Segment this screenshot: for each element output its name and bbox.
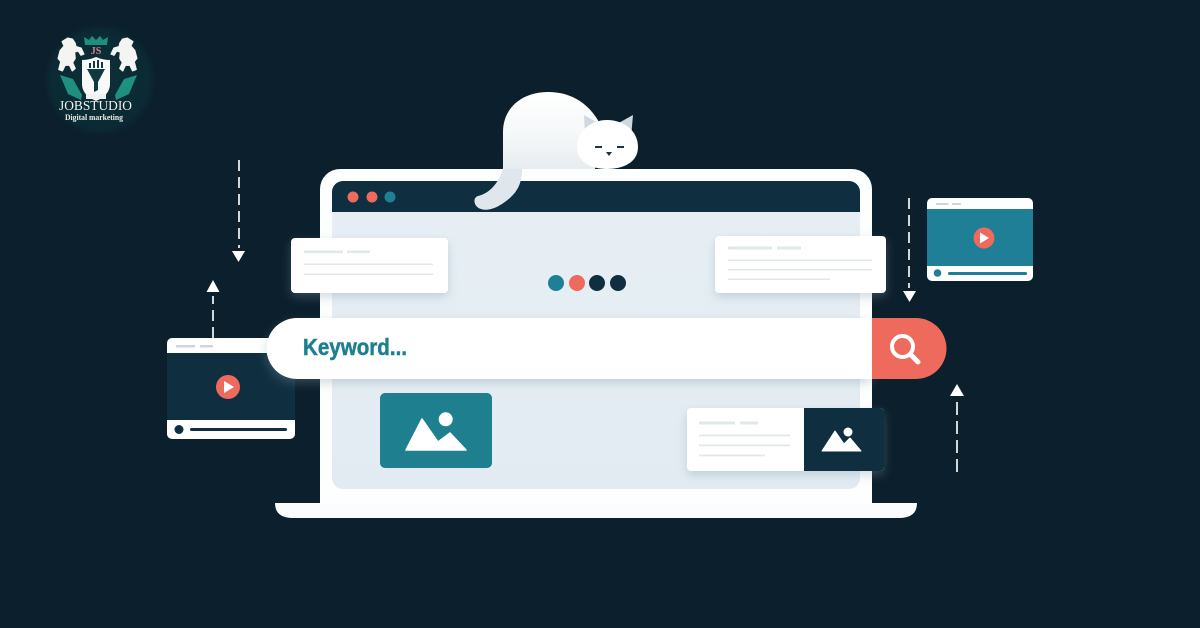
card text lines bbox=[699, 422, 790, 456]
laptop base bbox=[275, 503, 917, 518]
video frame bbox=[167, 353, 295, 420]
arrow: left dashed down bbox=[232, 160, 245, 262]
logo horse left bbox=[58, 38, 84, 71]
cat tail bbox=[474, 160, 522, 210]
teal image tile bbox=[380, 393, 492, 468]
logo crown bbox=[84, 36, 108, 45]
arrow: right dashed down bbox=[903, 198, 916, 302]
left video player bbox=[167, 338, 295, 439]
laptop screen bbox=[332, 181, 860, 489]
progress bar bbox=[934, 269, 1027, 277]
left text card bbox=[291, 238, 448, 293]
arrow: right dashed up bbox=[950, 384, 964, 472]
play button bbox=[974, 228, 994, 248]
play button bbox=[216, 375, 240, 399]
cat ears bbox=[584, 115, 633, 138]
loading dots bbox=[548, 275, 626, 291]
search bar bbox=[266, 318, 946, 379]
arrow: left dashed up bbox=[206, 280, 220, 338]
logo tagline: Digital marketing bbox=[65, 112, 124, 122]
cat head bbox=[577, 120, 638, 169]
text card with image bbox=[687, 408, 884, 471]
cat face bbox=[595, 147, 624, 156]
progress bar bbox=[174, 425, 287, 434]
search placeholder text: Keyword... bbox=[303, 334, 407, 360]
icon: mountains bbox=[406, 412, 466, 450]
dark image panel bbox=[804, 408, 884, 471]
logo horse right bbox=[111, 38, 137, 71]
laptop lid bbox=[320, 169, 872, 503]
right video player bbox=[927, 198, 1033, 281]
logo ribbon bbox=[86, 94, 106, 99]
title bar lines bbox=[176, 345, 195, 348]
video frame bbox=[927, 209, 1033, 266]
cat body bbox=[503, 92, 603, 169]
right text card bbox=[715, 236, 886, 293]
logo monogram: JS bbox=[91, 46, 102, 57]
search input bbox=[266, 318, 872, 379]
logo shield bbox=[82, 57, 110, 101]
laptop bbox=[275, 169, 917, 518]
logo brand name: JOBSTUDIO bbox=[59, 98, 132, 113]
logo leaves bbox=[60, 75, 137, 100]
title bar lines bbox=[936, 203, 948, 205]
icon: mountains bbox=[822, 428, 861, 451]
browser top bar bbox=[332, 181, 860, 212]
logo funnel chart bbox=[87, 60, 105, 92]
search button bbox=[872, 318, 946, 379]
cat bbox=[474, 92, 638, 210]
icon: magnifier bbox=[892, 336, 918, 362]
logo: Jobstudio crest bbox=[43, 23, 157, 137]
browser window dots bbox=[348, 192, 396, 202]
